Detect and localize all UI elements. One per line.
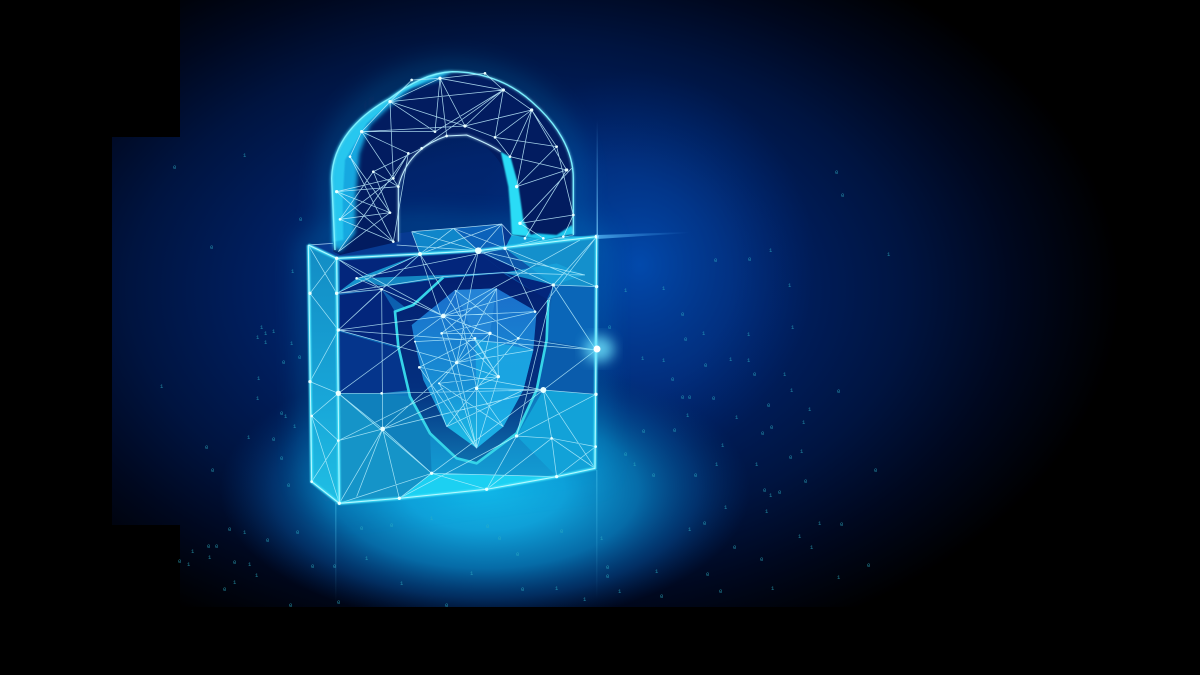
binary particles: 0 xyxy=(228,526,231,533)
binary particles: 0 xyxy=(652,472,655,479)
binary particles: 0 xyxy=(215,543,218,550)
binary particles: 1 xyxy=(715,461,719,468)
binary particles: 1 xyxy=(618,588,622,595)
binary particles: 0 xyxy=(719,588,722,595)
binary particles: 0 xyxy=(706,571,709,578)
binary particles: 0 xyxy=(767,402,770,409)
shackle mesh nodes xyxy=(335,72,575,243)
binary particles: 0 xyxy=(280,410,283,417)
binary particles: 1 xyxy=(641,355,645,362)
shackle rim xyxy=(332,72,573,250)
padlock shackle xyxy=(332,72,575,255)
binary particles: 0 xyxy=(498,535,501,542)
padlock body xyxy=(308,235,599,505)
binary particles: 0 xyxy=(282,359,285,366)
binary particles: 1 xyxy=(688,526,692,533)
binary particles: 1 xyxy=(264,339,268,346)
binary particles: 0 xyxy=(516,551,519,558)
binary particles: 1 xyxy=(791,324,795,331)
binary particles: 0 xyxy=(837,388,840,395)
background panel: stepped dark blue field xyxy=(112,0,1092,607)
shackle cyan left band xyxy=(332,72,452,252)
binary particles: 0 xyxy=(660,593,663,600)
illustration: glowing polygonal padlock on a dark blue background xyxy=(112,0,1092,607)
body bright edges xyxy=(308,237,597,503)
binary particles: 1 xyxy=(798,533,802,540)
binary particles: 1 xyxy=(735,414,739,421)
binary particles: 1 xyxy=(187,561,191,568)
binary particles: 1 xyxy=(260,324,264,331)
front face dark facets xyxy=(339,252,553,393)
binary particles: 1 xyxy=(257,375,261,382)
binary particles: 1 xyxy=(600,535,604,542)
binary particles: 0 xyxy=(681,394,684,401)
binary particles: 0 xyxy=(606,564,609,571)
binary particles: 1 xyxy=(662,357,666,364)
binary particles: 1 xyxy=(788,282,792,289)
binary particles: 1 xyxy=(771,585,775,592)
binary particles: 1 xyxy=(291,268,295,275)
binary particles: 0 xyxy=(223,586,226,593)
binary particles: 1 xyxy=(724,504,728,511)
binary particles: 0 xyxy=(311,563,314,570)
binary particles: 0 xyxy=(712,395,715,402)
binary particles: 0 xyxy=(606,573,609,580)
light streaks below the lock xyxy=(335,470,598,603)
binary particles: 1 xyxy=(191,548,195,555)
binary particles: 0 xyxy=(804,478,807,485)
left side face xyxy=(308,245,339,503)
binary particles: 0 xyxy=(841,192,844,199)
binary particles: 0 xyxy=(671,376,674,383)
binary particles: 1 xyxy=(747,357,751,364)
binary particles: 0 xyxy=(210,244,213,251)
binary particles: 1 xyxy=(810,544,814,551)
shackle mesh lines xyxy=(337,73,573,252)
binary particles: 0 xyxy=(298,354,301,361)
binary particles: 1 xyxy=(255,572,259,579)
inner shield xyxy=(412,288,537,448)
binary particles: 1 xyxy=(583,596,587,603)
binary particles: 1 xyxy=(243,152,247,159)
binary particles: 0 xyxy=(360,525,363,532)
binary particles: 1 xyxy=(887,251,891,258)
binary particles: 0 xyxy=(753,371,756,378)
binary particles: 0 xyxy=(704,362,707,369)
binary particles xyxy=(160,152,891,609)
binary particles: 1 xyxy=(729,356,733,363)
binary particles: 0 xyxy=(296,529,299,536)
binary particles: 1 xyxy=(248,561,252,568)
binary particles: 0 xyxy=(789,454,792,461)
binary particles: 1 xyxy=(272,328,276,335)
binary particles: 1 xyxy=(721,442,725,449)
binary particles: 0 xyxy=(760,556,763,563)
binary particles: 0 xyxy=(173,164,176,171)
binary particles: 1 xyxy=(662,285,666,292)
binary particles: 0 xyxy=(486,523,489,530)
binary particles: 1 xyxy=(470,570,474,577)
binary particles: 1 xyxy=(284,413,288,420)
outer shield outline xyxy=(395,277,548,463)
shackle body xyxy=(332,72,573,255)
binary particles: 1 xyxy=(256,395,260,402)
binary particles: 0 xyxy=(233,559,236,566)
binary particles: 0 xyxy=(608,324,611,331)
lock ambient glow xyxy=(308,72,597,503)
binary particles: 0 xyxy=(840,521,843,528)
binary particles: 1 xyxy=(633,461,637,468)
binary particles: 0 xyxy=(272,436,275,443)
binary particles: 1 xyxy=(233,579,237,586)
binary particles: 0 xyxy=(280,455,283,462)
binary particles: 0 xyxy=(778,489,781,496)
binary particles: 1 xyxy=(247,434,251,441)
body mesh lines xyxy=(308,237,597,503)
binary particles: 1 xyxy=(160,383,164,390)
shackle inner outline xyxy=(398,135,501,242)
binary particles: 1 xyxy=(747,331,751,338)
binary particles: 0 xyxy=(770,424,773,431)
binary particles: 0 xyxy=(703,520,706,527)
binary particles: 1 xyxy=(818,520,822,527)
binary particles: 0 xyxy=(211,467,214,474)
binary particles: 0 xyxy=(761,430,764,437)
front face xyxy=(337,237,597,503)
binary particles: 0 xyxy=(207,543,210,550)
binary particles: 1 xyxy=(800,448,804,455)
binary particles: 1 xyxy=(365,555,369,562)
binary particles: 1 xyxy=(555,585,559,592)
binary particles: 0 xyxy=(299,216,302,223)
front face mid facets xyxy=(337,237,597,503)
binary particles: 0 xyxy=(289,602,292,609)
binary particles: 0 xyxy=(560,528,563,535)
binary particles: 0 xyxy=(642,428,645,435)
binary particles: 1 xyxy=(808,406,812,413)
binary particles: 0 xyxy=(333,563,336,570)
binary particles: 0 xyxy=(337,599,340,606)
binary particles: 1 xyxy=(264,330,268,337)
binary particles: 1 xyxy=(765,508,769,515)
binary particles: 0 xyxy=(688,394,691,401)
binary particles: 1 xyxy=(686,412,690,419)
binary particles: 0 xyxy=(867,562,870,569)
binary particles: 1 xyxy=(802,419,806,426)
binary particles: 0 xyxy=(205,444,208,451)
binary particles: 0 xyxy=(287,482,290,489)
binary particles: 0 xyxy=(681,311,684,318)
binary particles: 0 xyxy=(835,169,838,176)
binary particles: 1 xyxy=(655,568,659,575)
binary particles: 0 xyxy=(714,257,717,264)
outer shield xyxy=(395,273,548,463)
body mesh nodes xyxy=(308,235,599,505)
binary particles: 0 xyxy=(748,256,751,263)
binary particles: 0 xyxy=(624,451,627,458)
binary particles: 0 xyxy=(694,472,697,479)
binary particles: 1 xyxy=(256,334,260,341)
binary particles: 1 xyxy=(702,330,706,337)
binary particles: 1 xyxy=(624,287,628,294)
padlock top face xyxy=(308,224,598,258)
binary particles: 1 xyxy=(837,574,841,581)
binary particles: 1 xyxy=(769,247,773,254)
shackle inner right band xyxy=(501,152,532,237)
binary particles: 0 xyxy=(673,427,676,434)
binary particles: 0 xyxy=(874,467,877,474)
binary particles: 1 xyxy=(783,371,787,378)
binary particles: 1 xyxy=(790,387,794,394)
binary particles: 0 xyxy=(266,537,269,544)
binary particles: 0 xyxy=(733,544,736,551)
binary particles: 0 xyxy=(445,602,448,609)
binary particles: 0 xyxy=(763,487,766,494)
binary particles: 1 xyxy=(769,492,773,499)
binary particles: 1 xyxy=(430,515,434,522)
binary particles: 0 xyxy=(684,336,687,343)
binary particles: 1 xyxy=(755,461,759,468)
binary particles: 0 xyxy=(178,558,181,565)
binary particles: 0 xyxy=(390,522,393,529)
binary particles: 0 xyxy=(521,586,524,593)
binary particles: 1 xyxy=(208,554,212,561)
binary particles: 1 xyxy=(293,423,297,430)
light flare: right edge of the body xyxy=(584,120,690,362)
binary particles: 1 xyxy=(400,580,404,587)
binary particles: 1 xyxy=(243,529,247,536)
binary particles: 1 xyxy=(290,340,294,347)
